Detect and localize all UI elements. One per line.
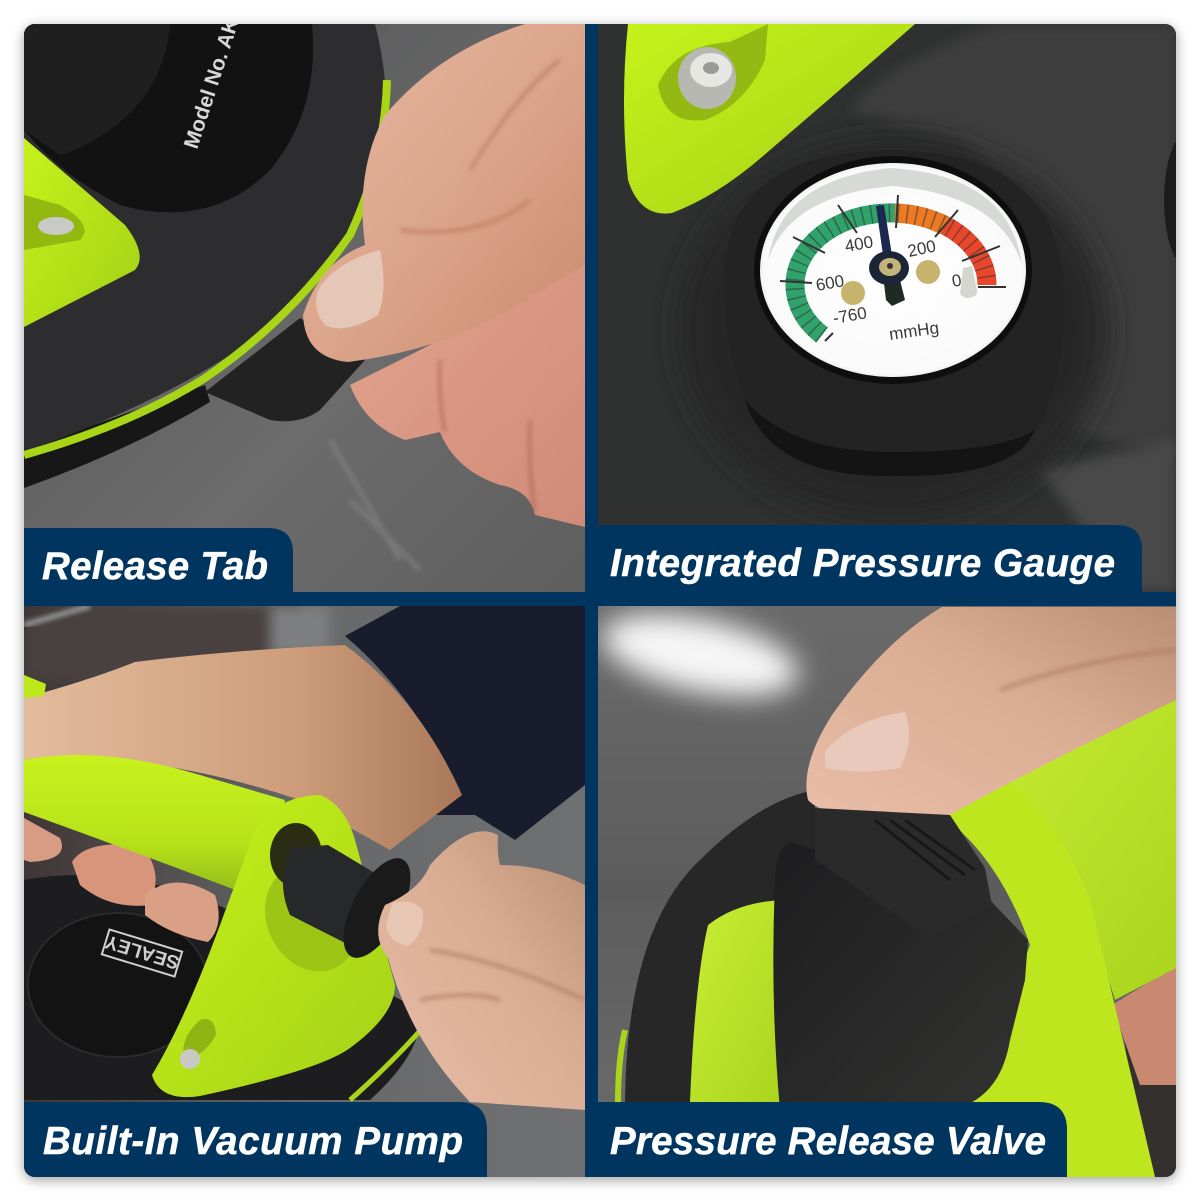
scale numbers: 400 xyxy=(843,232,875,256)
panel: release tab photo xyxy=(24,15,585,592)
forearm and back of hand xyxy=(24,645,462,850)
red arc xyxy=(895,213,987,285)
lime end tip xyxy=(24,675,46,698)
label: release tab: Release Tab xyxy=(42,545,268,588)
panel: pressure release valve photo xyxy=(595,599,1176,1177)
label: release tab xyxy=(24,528,293,592)
plunger xyxy=(282,845,374,942)
bolt xyxy=(180,1049,200,1069)
release tab xyxy=(205,318,365,421)
label: integrated pressure gauge: Integrated Pressure Gauge xyxy=(610,542,1115,585)
gauge base xyxy=(752,154,1048,224)
lower hand and dark base xyxy=(1120,965,1176,1177)
hand thumb xyxy=(303,24,585,362)
hand lower fingers xyxy=(350,260,585,527)
thumb xyxy=(806,607,1176,818)
black valve box xyxy=(773,842,1028,1110)
gauge dial: mmHg xyxy=(888,318,940,344)
thumbnail xyxy=(386,902,423,946)
gauge dial: 200 xyxy=(906,236,938,261)
green arc xyxy=(795,213,895,335)
panel: vacuum pump photo xyxy=(24,606,585,1177)
panel: pressure gauge photo xyxy=(598,24,1200,592)
needle xyxy=(876,205,892,252)
lime housing xyxy=(152,795,395,1097)
right hand xyxy=(378,831,585,1110)
label: pressure release valve: Pressure Release Valve xyxy=(610,1120,1046,1163)
label: pressure release valve xyxy=(585,1102,1067,1177)
thumbnail xyxy=(316,250,384,328)
suction cup body xyxy=(24,24,387,452)
gauge bezel xyxy=(754,156,1032,384)
label: built-in vacuum pump xyxy=(24,1102,487,1177)
lime band xyxy=(945,775,1155,1177)
suction cup xyxy=(625,790,815,1110)
gauge dial: 0 xyxy=(950,271,963,291)
lime mount xyxy=(624,24,915,214)
lime handle xyxy=(24,755,285,900)
fingers under handle xyxy=(24,818,62,862)
label: built-in vacuum pump: Built-In Vacuum Pump xyxy=(43,1120,463,1163)
sleeve xyxy=(345,606,585,840)
release pin xyxy=(960,266,977,298)
suction cup rim xyxy=(24,385,210,488)
inner recess xyxy=(24,24,313,212)
screws xyxy=(841,281,865,305)
label: integrated pressure gauge xyxy=(598,525,1142,592)
suction cup xyxy=(24,875,420,1100)
gauge dial xyxy=(760,163,1026,377)
thumbnail xyxy=(825,712,909,772)
lime rear housing xyxy=(690,900,790,1102)
scale ticks xyxy=(780,195,1006,341)
Sealey logo: SEALEY xyxy=(103,930,182,973)
gauge dial: 600 xyxy=(814,271,846,295)
lime triangle mount xyxy=(24,138,140,327)
housing socket xyxy=(265,877,350,972)
valve button xyxy=(815,808,992,938)
lime trim ring xyxy=(24,80,387,455)
model number text: Model No. AK xyxy=(180,15,244,152)
gauge dial: -760 xyxy=(831,303,868,328)
silver bolt xyxy=(678,47,736,109)
bolt xyxy=(38,217,74,235)
lime handle xyxy=(950,698,1176,1000)
